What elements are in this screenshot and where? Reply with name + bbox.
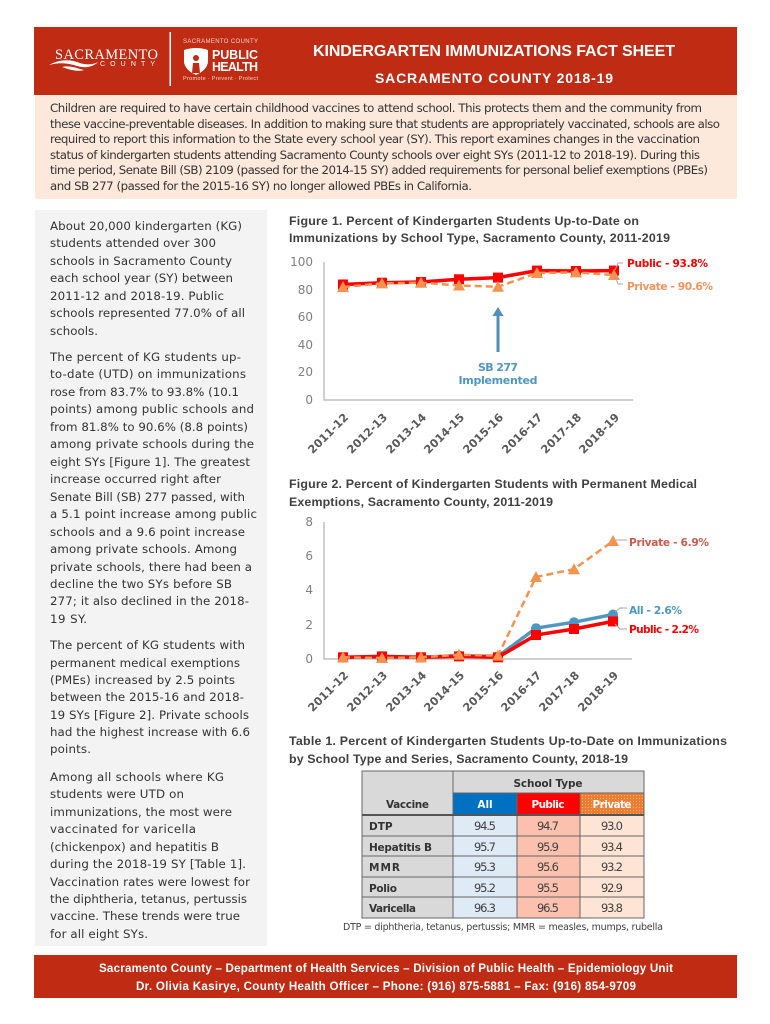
line chart: figure 1: 80	[298, 283, 313, 297]
row: Polio: Polio	[369, 883, 397, 895]
line chart: figure 1	[290, 255, 713, 456]
text block: up-to-date trends: decline the two SYs before SB	[50, 577, 232, 591]
table: up-to-date by series	[362, 771, 644, 918]
row: DTP: 94.5	[474, 819, 496, 833]
text block: up-to-date trends: to-date (UTD) on immunizations	[50, 367, 246, 381]
line chart: figure 1: 2012-13	[345, 411, 390, 456]
line chart: figure 2: 2012-13	[345, 669, 390, 714]
line chart: figure 2: 6	[305, 549, 313, 563]
line chart: figure 1: 2013-14	[384, 411, 429, 456]
row: MMR: 95.3	[474, 860, 496, 874]
footer banner: Sacramento County – Department of Health Services – Division of Public Health – Epidemiology Unit	[99, 962, 673, 975]
text block: up-to-date trends: 277; it also declined in the 2018-	[50, 594, 249, 608]
panel: introduction	[35, 95, 737, 199]
line chart: figure 1: 2015-16	[461, 411, 506, 456]
subtitle: SACRAMENTO COUNTY 2018-19	[375, 70, 613, 86]
table: up-to-date by series: Public	[532, 799, 564, 811]
row: Varicella: 93.8	[601, 901, 623, 915]
heading: figure 2: Exemptions, Sacramento County, 2011-2019	[289, 495, 553, 509]
row: Hepatitis B	[369, 840, 623, 854]
panel: introduction: Children are required to have certain childhood vaccines to attend school. This protects them and the community from	[50, 101, 702, 115]
label: private: Private - 90.6%	[627, 281, 713, 293]
arrow: SB 277	[492, 307, 504, 352]
heading: figure 2: Figure 2. Percent of Kindergarten Students with Permanent Medical	[289, 477, 697, 491]
row: MMR	[369, 860, 623, 874]
row: Hepatitis B: 95.7	[474, 840, 496, 854]
table footnote: DTP = diphtheria, tetanus, pertussis; MMR = measles, mumps, rubella	[343, 922, 663, 933]
row: Polio: 95.2	[474, 881, 496, 895]
line chart: figure 2: 0	[305, 652, 313, 666]
logo: Public Health: SACRAMENTO COUNTY	[183, 39, 258, 45]
heading: table 1	[289, 734, 727, 766]
text block: medical exemptions: between the 2015-16 and 2018-	[50, 690, 244, 704]
text block: vaccine series: vaccinated for varicella	[50, 822, 196, 836]
line chart: figure 2: 2016-17	[499, 669, 544, 714]
line chart: figure 2: 2011-12	[306, 669, 351, 714]
callout: SB 277 implemented	[458, 361, 538, 387]
line chart: figure 2	[305, 515, 709, 714]
panel: introduction: time period, Senate Bill (SB) 2109 (passed for the 2014-15 SY) added requirements for personal belief exemptions (PBEs)	[50, 163, 708, 177]
text block: vaccine series	[50, 770, 250, 941]
line chart: figure 1: 2014-15	[422, 411, 467, 456]
text block: vaccine series: during the 2018-19 SY [Table 1].	[50, 857, 246, 871]
row: Polio: 92.9	[601, 881, 623, 895]
text block: vaccine series: (chickenpox) and hepatitis B	[50, 840, 219, 854]
logo: Public Health: HEALTH	[212, 60, 258, 74]
text block: medical exemptions: permanent medical exemptions	[50, 656, 240, 670]
row: DTP: 94.7	[537, 819, 559, 833]
line chart: figure 1: 40	[298, 338, 313, 352]
text block: vaccine series: immunizations, the most were	[50, 805, 232, 819]
row: MMR: MMR	[369, 862, 400, 874]
text block: up-to-date trends	[49, 350, 257, 626]
label: all: All - 2.6%	[629, 605, 682, 617]
label: public: Public - 93.8%	[627, 258, 708, 270]
text block: enrollment: each school year (SY) between	[50, 271, 233, 285]
row: Varicella: Varicella	[369, 903, 416, 915]
logo: Sacramento County: COUNTY	[100, 61, 155, 68]
footer banner: Dr. Olivia Kasirye, County Health Officer – Phone: (916) 875-5881 – Fax: (916) 854-9709	[136, 980, 637, 993]
divider line in logo	[170, 32, 171, 86]
row: Varicella: 96.5	[537, 901, 559, 915]
text block: up-to-date trends: from 81.8% to 90.6% (8.8 points)	[50, 420, 248, 434]
logo: Public Health: PUBLIC	[212, 48, 258, 62]
row: Polio: 95.5	[537, 881, 559, 895]
line chart: figure 2: 2	[305, 618, 313, 632]
text block: enrollment: About 20,000 kindergarten (KG)	[50, 219, 242, 233]
heading: figure 1: Immunizations by School Type, Sacramento County, 2011-2019	[289, 231, 670, 245]
heading: table 1: Table 1. Percent of Kindergarten Students Up-to-Date on Immunizations	[289, 734, 727, 748]
text block: up-to-date trends: 19 SY.	[50, 612, 87, 626]
panel: narrative sidebar	[35, 210, 267, 946]
line chart: figure 2: 4	[305, 583, 313, 597]
callout: SB 277 implemented: SB 277	[478, 361, 518, 374]
series: all	[343, 614, 613, 657]
series: public	[343, 271, 614, 284]
text block: medical exemptions: points.	[50, 742, 91, 756]
heading: figure 2	[289, 477, 697, 509]
logo: Public Health	[183, 39, 258, 82]
text block: up-to-date trends: points) among public schools and	[50, 402, 254, 416]
row: DTP: 93.0	[601, 819, 623, 833]
text block: vaccine series: Vaccination rates were lowest for	[50, 875, 250, 889]
text block: vaccine series: for all eight SYs.	[50, 927, 148, 941]
series: private	[343, 272, 614, 287]
line chart: figure 1: 2016-17	[500, 411, 545, 456]
row: Hepatitis B: Hepatitis B	[369, 842, 432, 854]
text block: enrollment: 2011-12 and 2018-19. Public	[50, 289, 224, 303]
logo: Sacramento County: SACRAMENTO	[55, 47, 158, 63]
title: KINDERGARTEN IMMUNIZATIONS FACT SHEET	[313, 43, 675, 60]
row: Hepatitis B: 93.4	[601, 840, 623, 854]
row: Varicella: 96.3	[474, 901, 496, 915]
header banner	[34, 27, 737, 95]
line chart: figure 1: 2017-18	[539, 411, 584, 456]
row: DTP: DTP	[369, 821, 393, 833]
heading: figure 1: Figure 1. Percent of Kindergarten Students Up-to-Date on	[289, 214, 639, 228]
line chart: figure 1: 100	[290, 255, 313, 269]
line chart: figure 2: 2013-14	[384, 669, 429, 714]
line chart: figure 1: 2018-19	[577, 411, 622, 456]
table: up-to-date by series: Private	[592, 799, 632, 811]
text block: up-to-date trends: private schools, there had been a	[50, 560, 252, 574]
text block: vaccine series: the diphtheria, tetanus, pertussis	[50, 892, 247, 906]
heading: figure 1	[289, 214, 670, 245]
line chart: figure 2: 2017-18	[537, 669, 582, 714]
text block: up-to-date trends: Senate Bill (SB) 277 passed, with	[50, 490, 245, 504]
text block: up-to-date trends: a 5.1 point increase among public	[50, 507, 257, 521]
table: up-to-date by series: Vaccine	[386, 799, 429, 811]
table: up-to-date by series: School Type	[514, 778, 582, 790]
row: Hepatitis B: 95.9	[537, 840, 559, 854]
series: public	[343, 621, 613, 657]
text block: medical exemptions: had the highest increase with 6.6	[50, 725, 250, 739]
text block: up-to-date trends: eight SYs [Figure 1]. The greatest	[50, 455, 250, 469]
text block: vaccine series: vaccine. These trends were true	[50, 909, 240, 923]
line chart: figure 2: 2015-16	[461, 669, 506, 714]
line chart: figure 1: 0	[305, 393, 313, 407]
text block: enrollment	[50, 219, 245, 338]
row: MMR: 95.6	[537, 860, 559, 874]
logo: Sacramento County	[49, 47, 158, 71]
footer banner	[34, 955, 737, 998]
text block: medical exemptions: The percent of KG students with	[49, 638, 245, 652]
text block: medical exemptions: (PMEs) increased by 2.5 points	[50, 673, 235, 687]
panel: introduction: status of kindergarten students attending Sacramento County schools over eight SYs (2011-12 to 2018-19). During this	[50, 148, 700, 162]
panel: introduction: required to report this information to the State every school year (SY). This report examines changes in the vaccination	[50, 132, 700, 146]
text block: enrollment: schools in Sacramento County	[50, 254, 232, 268]
text block: up-to-date trends: among private schools during the	[50, 437, 254, 451]
line chart: figure 1: 2011-12	[306, 411, 351, 456]
text block: vaccine series: students were UTD on	[50, 787, 184, 801]
row: Polio	[369, 881, 623, 895]
text block: medical exemptions	[49, 638, 250, 756]
callout: SB 277 implemented: Implemented	[458, 374, 538, 387]
line chart: figure 2: 8	[305, 515, 313, 529]
heading: table 1: by School Type and Series, Sacramento County, 2018-19	[289, 752, 628, 766]
text block: up-to-date trends: The percent of KG students up-	[49, 350, 241, 364]
text block: enrollment: students attended over 300	[50, 236, 216, 250]
line chart: figure 1: 60	[298, 310, 313, 324]
text block: medical exemptions: 19 SYs [Figure 2]. Private schools	[50, 708, 249, 722]
text block: enrollment: schools.	[50, 324, 98, 338]
row: MMR: 93.2	[601, 860, 623, 874]
line chart: figure 2: 2014-15	[422, 669, 467, 714]
line chart: figure 2: 2018-19	[576, 669, 621, 714]
text block: enrollment: schools represented 77.0% of all	[50, 306, 245, 320]
text block: up-to-date trends: among private schools. Among	[50, 542, 237, 556]
text block: up-to-date trends: increase occurred right after	[50, 472, 221, 486]
text block: vaccine series: Among all schools where KG	[50, 770, 224, 784]
table: up-to-date by series: All	[477, 799, 493, 811]
label: public: Public - 2.2%	[629, 624, 699, 636]
line chart: figure 1: 20	[298, 365, 313, 379]
text block: up-to-date trends: rose from 83.7% to 93.8% (10.1	[50, 385, 239, 399]
logo: Public Health: Promote · Prevent · Protect	[183, 76, 258, 82]
text block: up-to-date trends: schools and a 9.6 point increase	[50, 525, 245, 539]
row: DTP	[369, 819, 623, 833]
row: Varicella	[369, 901, 623, 915]
panel: introduction: and SB 277 (passed for the 2015-16 SY) no longer allowed PBEs in California.	[50, 179, 472, 193]
series: private	[343, 541, 613, 658]
panel: introduction: these vaccine-preventable diseases. In addition to making sure that students are appropriately vaccinated, schools are also	[50, 117, 720, 131]
label: private: Private - 6.9%	[629, 537, 709, 549]
